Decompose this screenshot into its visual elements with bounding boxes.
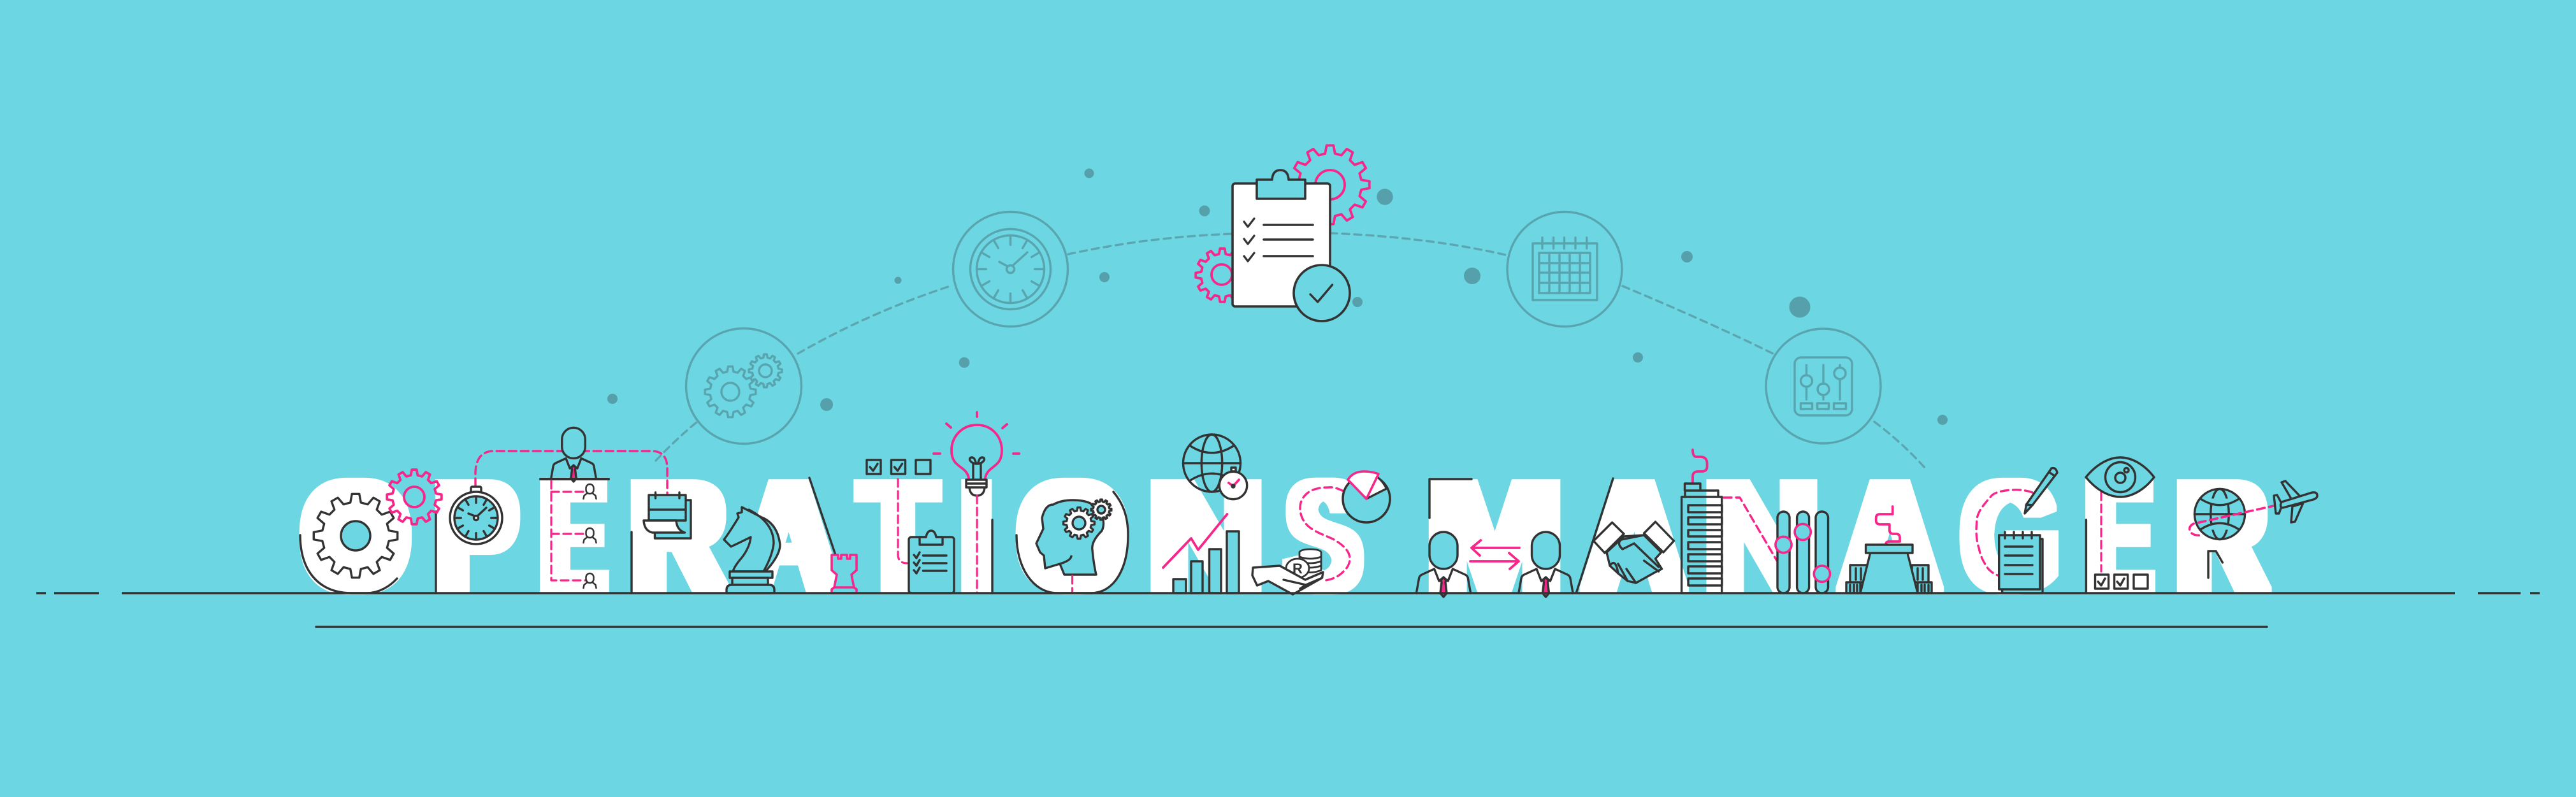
pink exchange arrows: [1470, 540, 1519, 569]
icon: globe on R: [2195, 489, 2245, 539]
pink dashed line on E: [2100, 492, 2102, 571]
icon: slider controls on N: [1776, 512, 1830, 593]
faded icon: sliders in circle: [1766, 329, 1881, 443]
checklist: [1244, 219, 1313, 261]
check badge: [1294, 265, 1350, 321]
coin letter: R: [1292, 561, 1303, 577]
title: OPERATIONS MANAGER: N: [1148, 448, 1264, 624]
icon: checkboxes above T: [867, 460, 930, 474]
background dots: [607, 168, 1948, 425]
title: OPERATIONS MANAGER: P: [436, 449, 516, 624]
title: OPERATIONS MANAGER: S: [1288, 449, 1360, 624]
icon: light bulb over I: [934, 412, 1019, 593]
pink dashed S path: [1300, 487, 1350, 580]
title: OPERATIONS MANAGER: R: [2177, 448, 2266, 624]
title: OPERATIONS MANAGER: T: [861, 448, 935, 624]
icon: pie chart: [1343, 471, 1390, 522]
bar chart with pink trend line: [1163, 514, 1239, 593]
faded icon: clock in circle: [953, 212, 1068, 326]
central clipboard with gears and check badge: [1196, 145, 1370, 321]
ground lines: [36, 593, 2540, 627]
icon: eye on E: [2086, 457, 2154, 497]
icon: pencil: [2025, 468, 2057, 513]
icon: calendar note on R: [644, 492, 691, 538]
faded icon: gears in circle: [686, 329, 802, 443]
icon: large pink gear: [1291, 145, 1370, 224]
title: OPERATIONS MANAGER: N: [1704, 448, 1820, 624]
icon: checkboxes on E: [2095, 575, 2148, 589]
icon: office building with pink smoke: [1682, 450, 1722, 593]
pink dashed line on G: [1976, 490, 2032, 575]
icon: clipboard checklist on T: [909, 531, 954, 593]
icon: chess knight: [724, 507, 780, 593]
title: OPERATIONS MANAGER: A: [1841, 448, 1939, 624]
title: OPERATIONS MANAGER: A: [1584, 449, 1684, 624]
icon: two managers exchanging on M: [1416, 532, 1573, 597]
title: OPERATIONS MANAGER: A: [739, 448, 837, 624]
icon: airplane: [2274, 481, 2317, 522]
icon: notepad on G: [1999, 532, 2043, 593]
icon: handshake on A: [1593, 522, 1674, 583]
icon: globe with watch above N: [1183, 434, 1247, 499]
icon: hand holding coins: [1252, 549, 1323, 594]
icon: org chart on E: [551, 481, 597, 588]
icon: pink rook: [832, 555, 857, 593]
pink dashed line on N: [1724, 498, 1777, 561]
clipboard sheet: [1233, 183, 1330, 306]
icon: pink gear between O and P: [387, 470, 442, 524]
title: OPERATIONS MANAGER: O: [1018, 449, 1126, 624]
icon: manager at desk on E: [540, 427, 609, 482]
pink dashed link from stopwatch to calendar: [475, 451, 667, 494]
title: OPERATIONS MANAGER: R: [631, 449, 725, 624]
pink dashed line down T: [898, 479, 907, 563]
title: OPERATIONS MANAGER: E: [2088, 449, 2150, 624]
title: OPERATIONS MANAGER: I: [964, 448, 990, 624]
title: OPERATIONS MANAGER: O: [302, 449, 409, 624]
faded icon: calendar in circle: [1507, 212, 1622, 326]
title: OPERATIONS MANAGER: E: [542, 449, 604, 624]
pink dashed flight path: [2190, 505, 2276, 535]
icon: small pink gear: [1196, 248, 1249, 302]
title: OPERATIONS MANAGER: [302, 448, 2266, 624]
letter accent outlines: [300, 478, 2222, 593]
title: OPERATIONS MANAGER: M: [1426, 449, 1563, 624]
icon: stopwatch in P: [450, 487, 502, 544]
icon: factory with pink smoke on A: [1846, 506, 1932, 593]
icon: head with gears in O: [1036, 499, 1111, 593]
title: OPERATIONS MANAGER: G: [1963, 449, 2057, 624]
dashed arc connecting the icons: [656, 233, 1925, 468]
clipboard clip: [1257, 170, 1305, 199]
icon: white gear in O: [314, 494, 398, 578]
